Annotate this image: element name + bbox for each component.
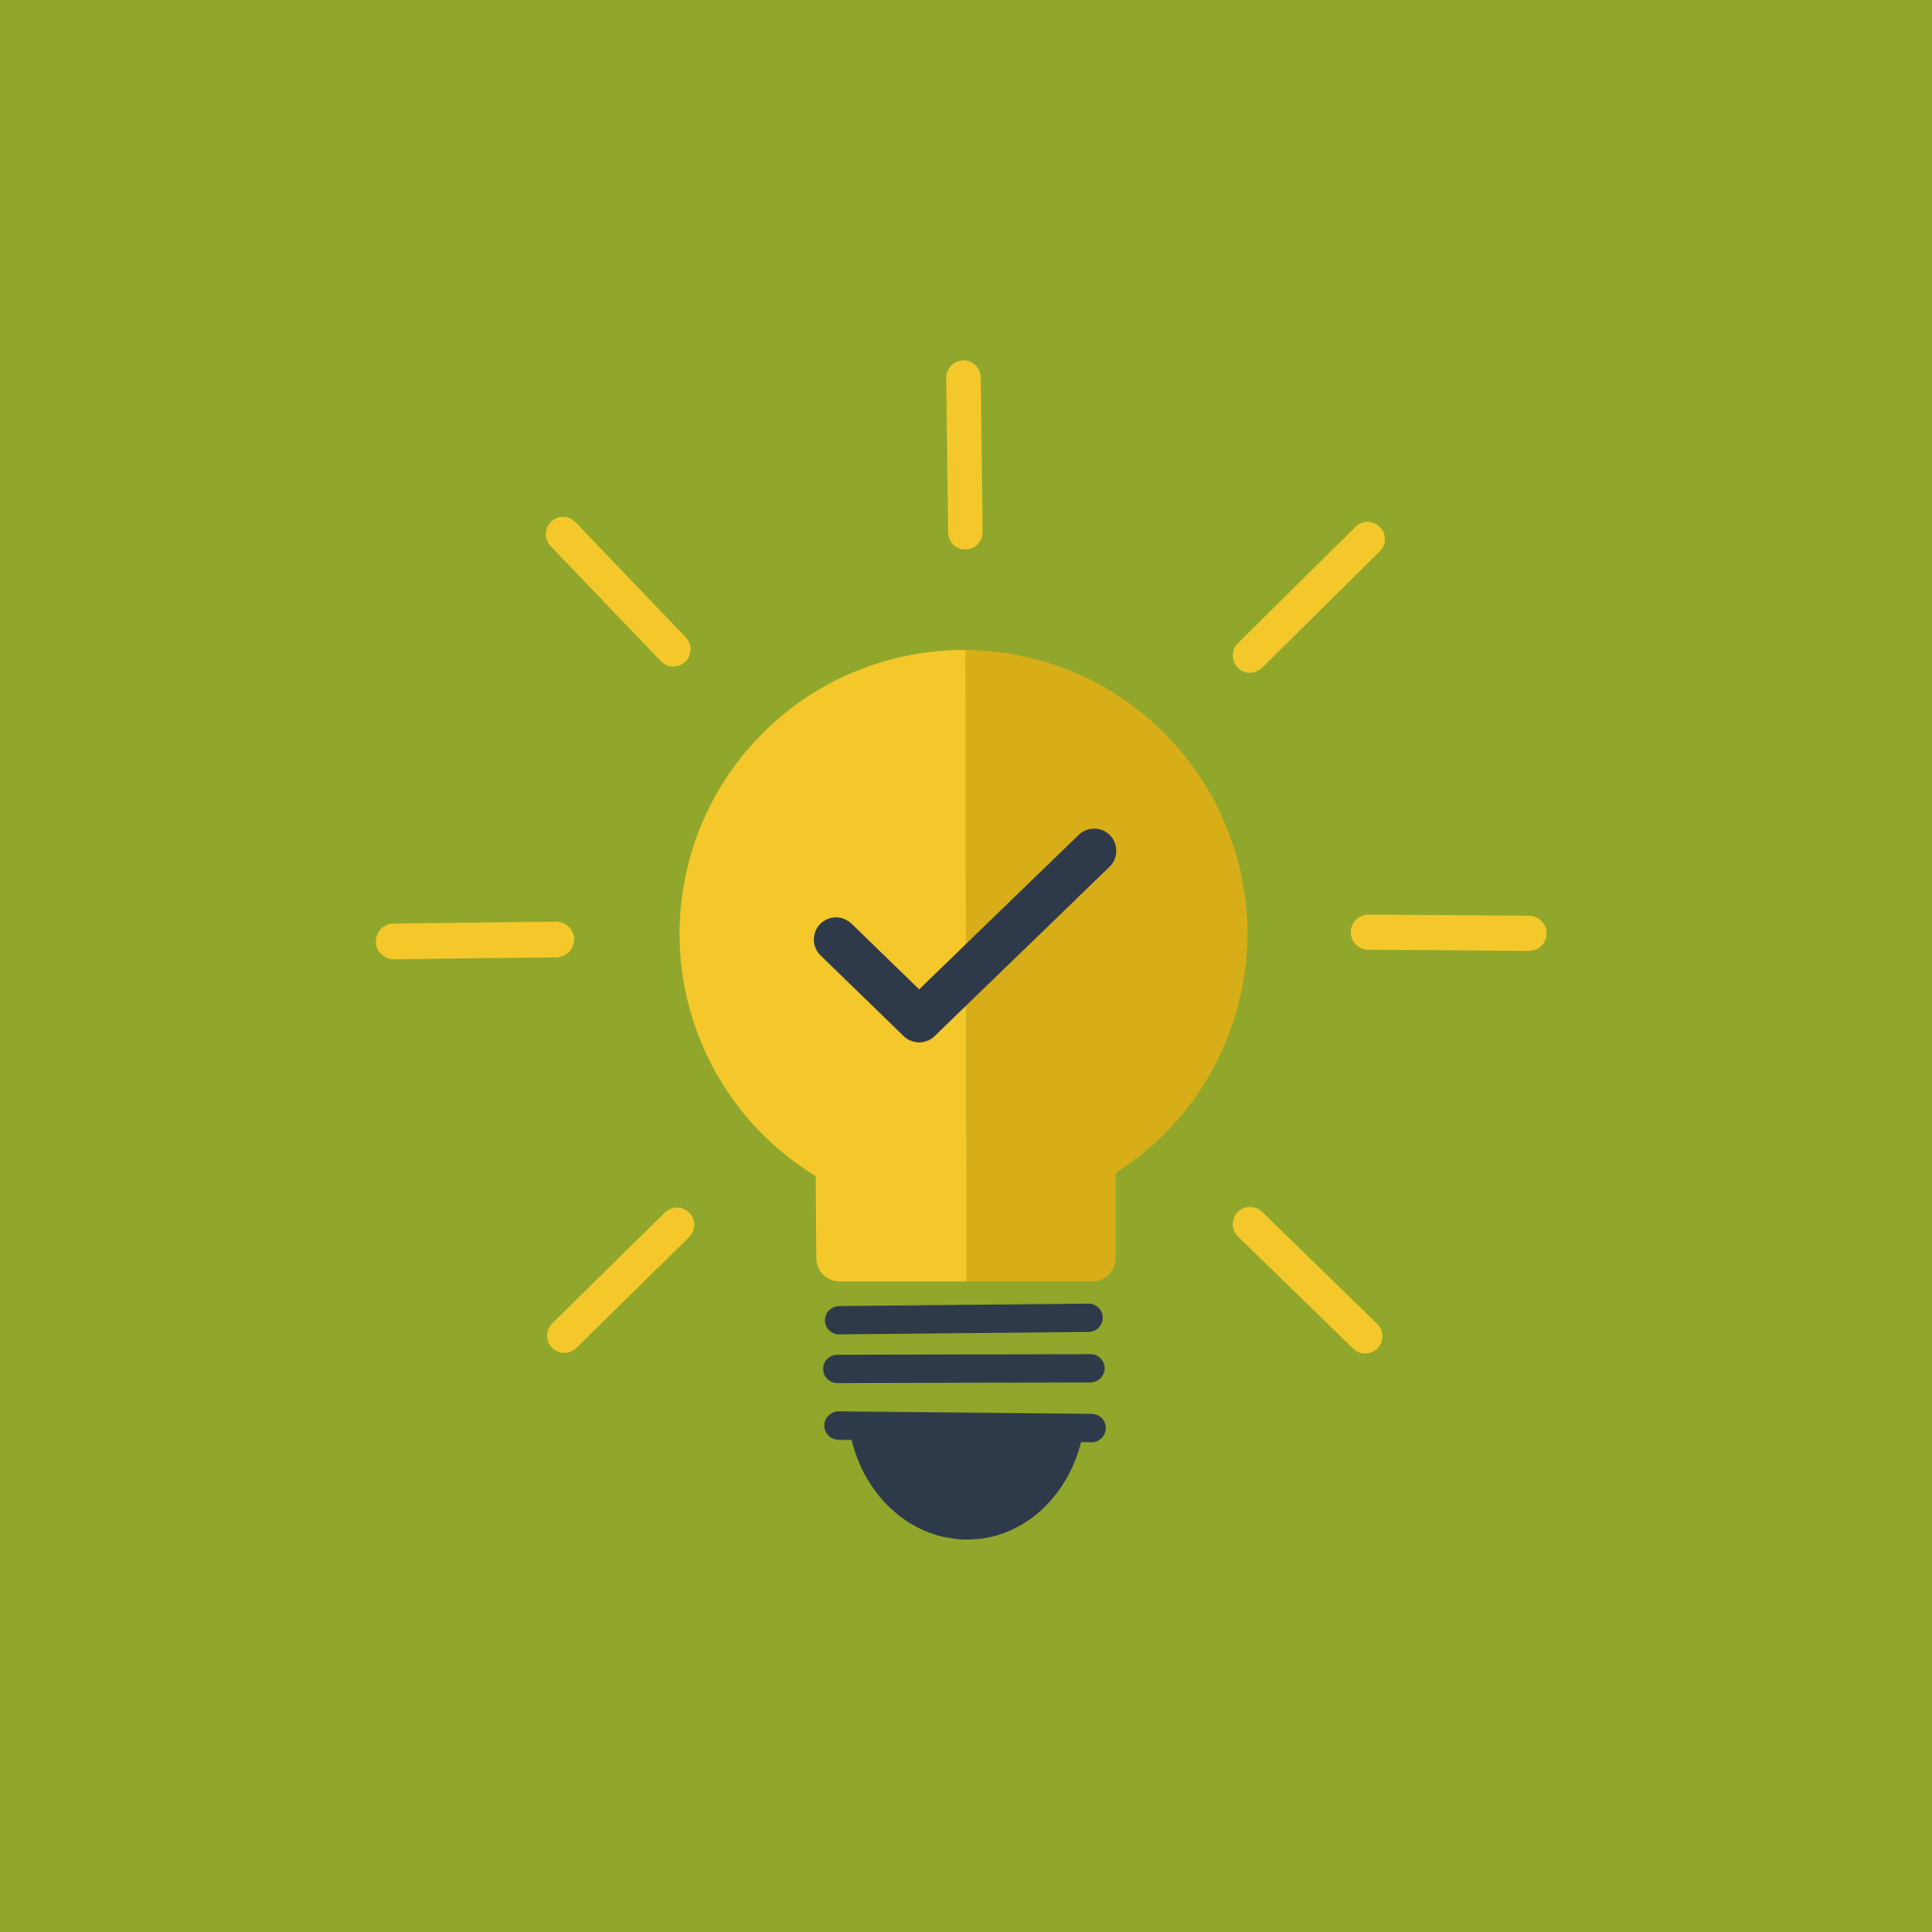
- ray: bottom right: [1250, 1224, 1365, 1336]
- bulb left half: [679, 650, 967, 1281]
- thread line 1: [839, 1318, 1089, 1321]
- ray: top: [963, 377, 965, 532]
- light rays: [393, 377, 1529, 1336]
- light bulb glass: [679, 650, 1247, 1281]
- ray: left: [393, 940, 557, 941]
- ray: top left: [563, 534, 674, 649]
- thread line 2: [838, 1357, 1091, 1380]
- base dome: [852, 1429, 1082, 1540]
- ray: top right: [1250, 539, 1368, 656]
- ray: right: [1368, 932, 1529, 933]
- bulb screw base: [838, 1318, 1091, 1540]
- bulb right half: [965, 650, 1247, 1281]
- ray: bottom left: [564, 1224, 677, 1336]
- thread line 3: [839, 1425, 1091, 1428]
- check mark: [836, 851, 1094, 1020]
